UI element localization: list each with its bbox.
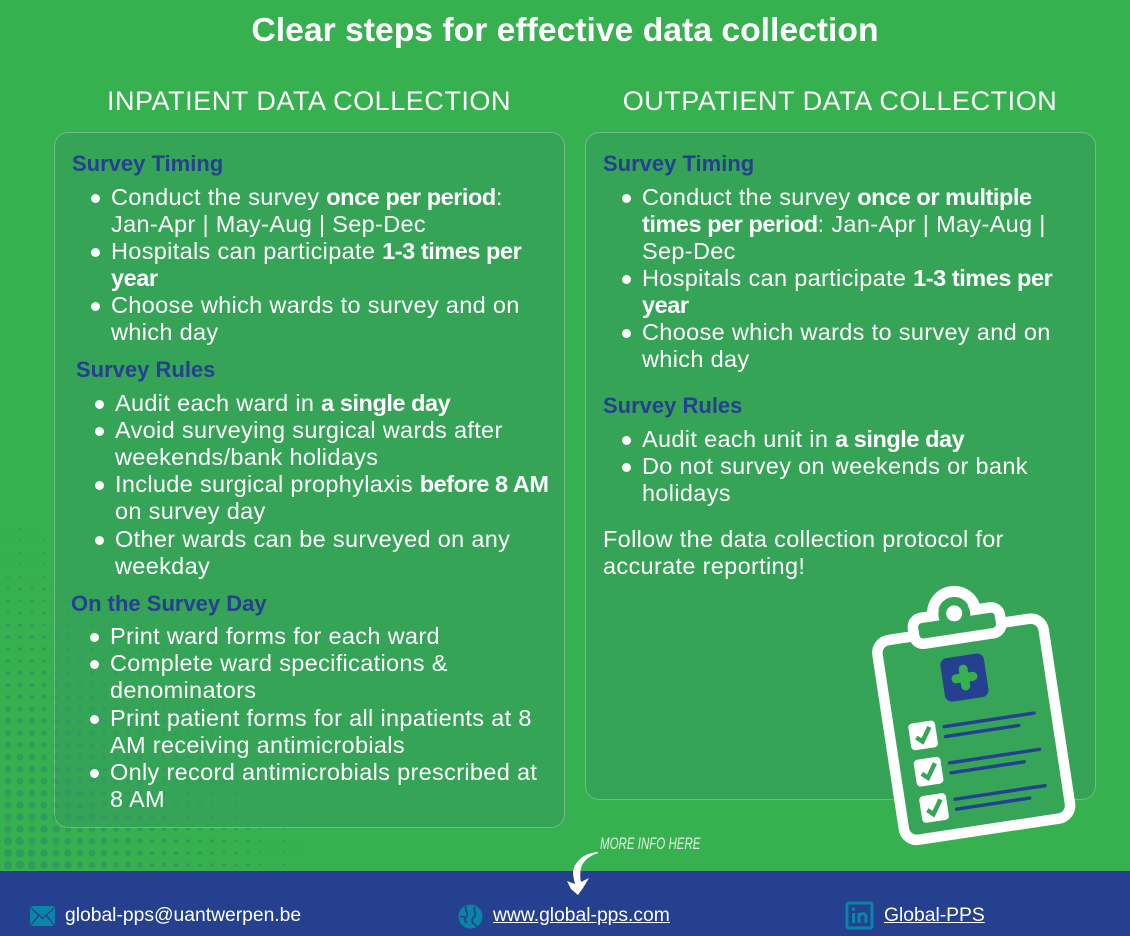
halftone dot pattern — [0, 528, 297, 869]
inpatient: day bullet 4: 8 AM — [110, 786, 165, 812]
icon: email — [30, 906, 55, 926]
title: Clear steps for effective data collection — [251, 11, 879, 49]
inpatient: timing bullet 1: Jan-Apr | May-Aug | Sep-Dec — [111, 211, 426, 237]
outpatient: rules bullet 2: Do not survey on weekends or bank — [642, 453, 1028, 479]
inpatient: rules bullet 3: on survey day — [115, 498, 266, 524]
inpatient: timing bullet 3: Choose which wards to survey and on — [111, 292, 520, 318]
linkedin link: Global-PPS — [884, 905, 985, 926]
inpatient: day bullet 3 — [110, 705, 532, 759]
inpatient: day bullet 3: Print patient forms for all inpatients at 8 — [110, 705, 532, 731]
outpatient: timing bullet 1: Conduct the survey once or multiple — [642, 184, 1032, 210]
outpatient: closing note — [603, 526, 1004, 579]
inpatient: timing bullet 1 — [111, 184, 503, 238]
inpatient: day bullet 2: Complete ward specifications & — [110, 650, 448, 676]
outpatient: timing bullet 2: Hospitals can participate 1-3 times per — [642, 265, 1052, 291]
outpatient: survey timing heading: Survey Timing — [603, 151, 754, 176]
heading: inpatient: INPATIENT DATA COLLECTION — [107, 86, 511, 116]
inpatient: timing bullet 3 — [111, 292, 520, 346]
outpatient: timing bullet 3 — [642, 319, 1051, 373]
outpatient: closing note: accurate reporting! — [603, 553, 805, 579]
website link: www.global-pps.com — [493, 905, 670, 926]
inpatient: day bullet 2 — [110, 650, 448, 704]
inpatient: survey timing heading: Survey Timing — [72, 151, 223, 176]
icon: linkedin — [846, 902, 874, 930]
email address: global-pps@uantwerpen.be — [65, 905, 301, 926]
inpatient: rules bullet 2: weekends/bank holidays — [115, 444, 378, 470]
heading: outpatient: OUTPATIENT DATA COLLECTION — [623, 86, 1057, 116]
inpatient: timing bullet 2: Hospitals can participate 1-3 times per — [111, 238, 521, 264]
panel: outpatient — [585, 132, 1096, 800]
outpatient: rules bullet 2 — [642, 453, 1028, 507]
inpatient: rules bullet 3: Include surgical prophylaxis before 8 AM — [115, 471, 548, 497]
outpatient: timing bullet 2: year — [642, 292, 689, 318]
icon: clipboard — [872, 586, 1076, 846]
more info label: MORE INFO HERE — [600, 834, 700, 853]
inpatient: rules bullet 4 — [115, 526, 510, 580]
icon: globe — [458, 904, 482, 928]
outpatient: survey rules heading: Survey Rules — [603, 393, 742, 418]
inpatient: day bullet 3: AM receiving antimicrobials — [110, 732, 405, 758]
outpatient: timing bullet 3: which day — [642, 346, 749, 372]
inpatient: timing bullet 2: year — [111, 265, 158, 291]
outpatient: rules bullet 1: Audit each unit in a single day — [642, 426, 964, 452]
inpatient: day bullet 2: denominators — [110, 677, 256, 703]
arrow: more info — [567, 852, 598, 895]
inpatient: timing bullet 1: Conduct the survey once per period: — [111, 184, 503, 210]
panel: inpatient — [54, 132, 565, 828]
outpatient: timing bullet 1: Sep-Dec — [642, 238, 736, 264]
inpatient: timing bullet 2 — [111, 238, 521, 292]
inpatient: day bullet 4: Only record antimicrobials prescribed at — [110, 759, 537, 785]
outpatient: timing bullet 1 — [642, 184, 1046, 265]
outpatient: rules bullet 2: holidays — [642, 480, 731, 506]
outpatient: timing bullet 3: Choose which wards to survey and on — [642, 319, 1051, 345]
outpatient: closing note: Follow the data collection protocol for — [603, 526, 1004, 552]
outpatient: timing bullet 1: times per period: Jan-Apr | May-Aug | — [642, 211, 1046, 237]
outpatient: timing bullet 2 — [642, 265, 1052, 319]
inpatient: rules bullet 2 — [115, 417, 503, 471]
inpatient: survey rules heading: Survey Rules — [76, 357, 215, 382]
inpatient: rules bullet 1: Audit each ward in a single day — [115, 390, 450, 416]
inpatient: survey day heading: On the Survey Day — [71, 591, 267, 616]
inpatient: rules bullet 4: Other wards can be surveyed on any — [115, 526, 510, 552]
inpatient: rules bullet 4: weekday — [115, 553, 210, 579]
inpatient: timing bullet 3: which day — [111, 319, 218, 345]
inpatient: day bullet 4 — [110, 759, 537, 813]
footer bar — [0, 871, 1130, 936]
inpatient: rules bullet 2: Avoid surveying surgical wards after — [115, 417, 503, 443]
inpatient: rules bullet 3 — [115, 471, 548, 525]
inpatient: day bullet 1: Print ward forms for each ward — [110, 623, 440, 649]
